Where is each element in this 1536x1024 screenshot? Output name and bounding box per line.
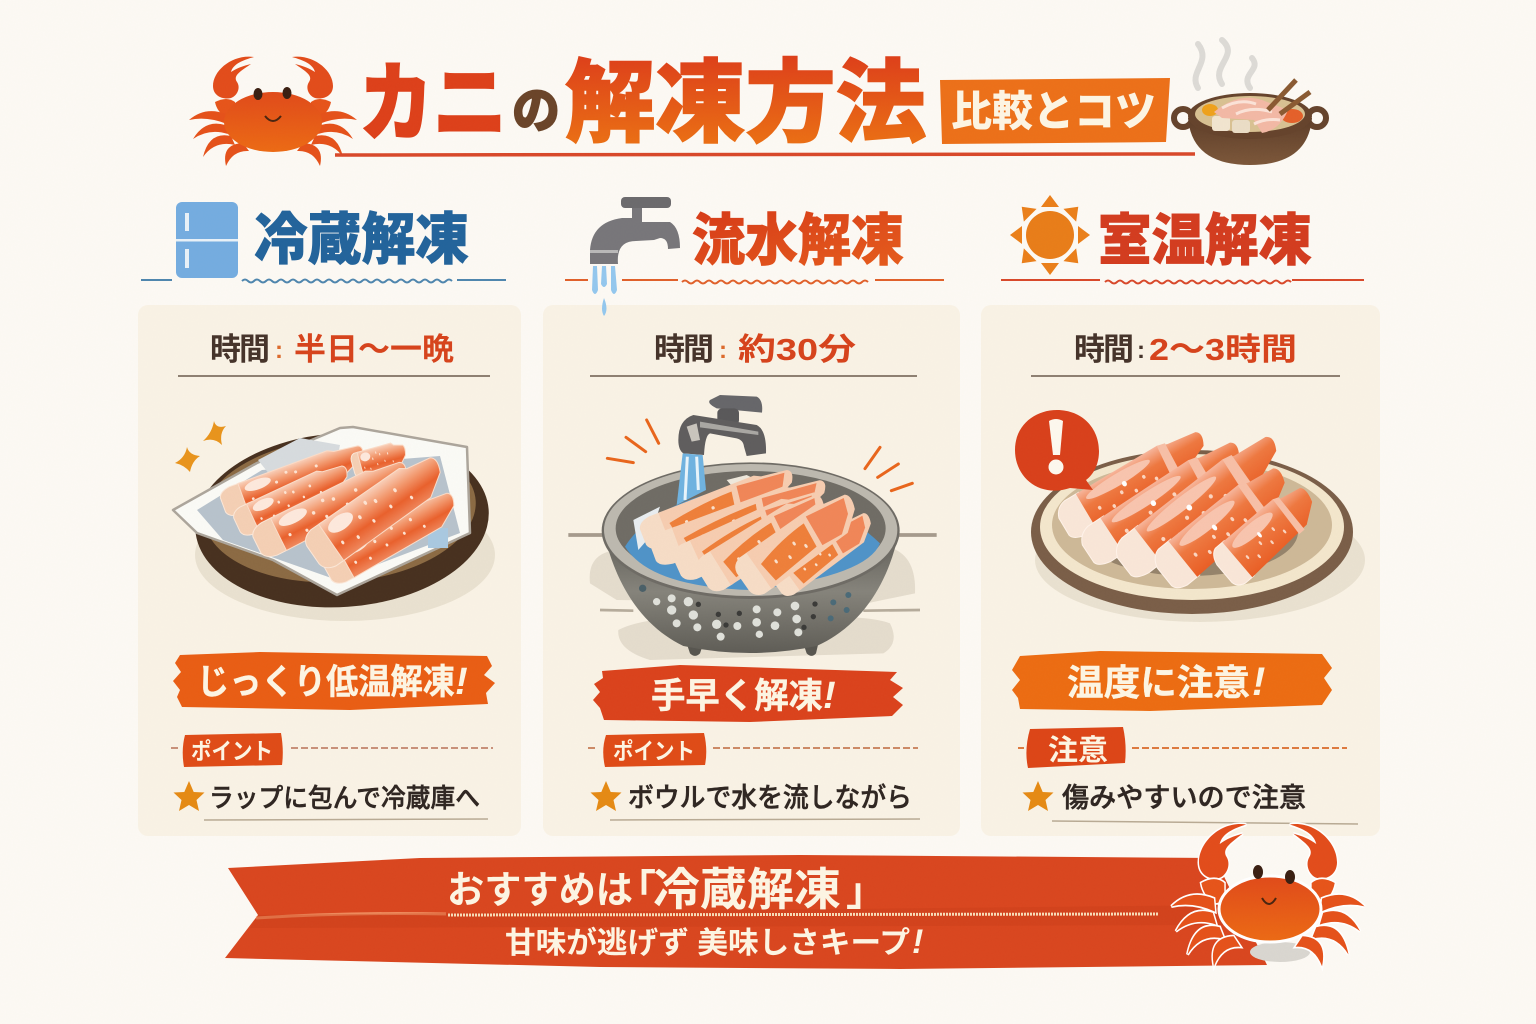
icon: sparkles [175, 421, 226, 472]
time divider [590, 375, 917, 377]
ribbon headline: 「 [616, 868, 656, 912]
subtitle tag: 比較とコツ [940, 78, 1170, 144]
banner: 手早く解凍！: ! [823, 675, 836, 717]
banner: じっくり低温解凍！: じっくり低温解凍 [197, 663, 455, 702]
tip underline [204, 819, 488, 820]
time label [654, 332, 856, 367]
ribbon headline: おすすめは [447, 870, 633, 912]
title: カニの解凍方法: 解凍方法 [565, 54, 926, 154]
time divider [178, 375, 490, 377]
recommendation ribbon [225, 855, 1267, 969]
title: カニの解凍方法: カニ [359, 56, 507, 152]
tip underline [610, 819, 920, 820]
tag: 注意: 注意 [1048, 734, 1108, 767]
wavy underline [1001, 280, 1364, 284]
banner: 手早く解凍！: 手早く解凍 [651, 677, 823, 716]
wavy underline [565, 280, 944, 284]
banner: 手早く解凍！ [593, 665, 903, 722]
wavy underline [141, 280, 506, 282]
title underline [335, 154, 1195, 155]
caution row [1018, 727, 1358, 824]
tag: ポイント [603, 733, 706, 767]
ribbon subline: 甘味が逃げず 美味しさキープ [505, 926, 910, 960]
dashed rule [1018, 747, 1347, 749]
time label: 時間 [210, 332, 270, 367]
time label: : [1137, 337, 1145, 364]
tag: 注意 [1026, 727, 1126, 768]
icon: sun [1010, 195, 1090, 275]
time label: 半日〜一晩 [294, 332, 454, 367]
illustration: colander under faucet [568, 395, 937, 660]
banner: 温度に注意！ [1012, 651, 1332, 711]
icon: faucet with drops [590, 197, 680, 316]
panel: room temperature thawing [981, 305, 1380, 836]
heading text: 冷蔵解凍 [254, 208, 469, 271]
time label: 時間 [654, 332, 714, 367]
dashed rule [171, 747, 493, 749]
ribbon headline [447, 864, 886, 915]
panel: refrigerator thawing [138, 305, 521, 836]
icon: star [174, 781, 204, 811]
heading text: 流水解凍 [692, 209, 904, 272]
subtitle tag: 比較とコツ: 比較とコツ [951, 88, 1156, 135]
icon: steaming hot pot [1174, 40, 1326, 165]
header [189, 40, 1326, 166]
tip text: ラップに包んで冷蔵庫へ [209, 783, 480, 813]
icon: star [1022, 781, 1054, 811]
point row [171, 733, 493, 820]
tip underline [1052, 821, 1358, 824]
time label [1074, 332, 1297, 367]
banner: じっくり低温解凍！ [173, 652, 495, 710]
time label: 約30分 [738, 332, 856, 367]
heading text: 室温解凍 [1098, 209, 1312, 272]
ribbon divider [448, 914, 1158, 915]
time divider [1031, 375, 1340, 377]
banner: 温度に注意！: ! [1252, 660, 1265, 704]
column heading: 冷蔵解凍 [141, 202, 506, 282]
time label [210, 332, 454, 367]
time label: : [275, 337, 283, 364]
tag: ポイント: ポイント [191, 738, 273, 764]
column heading: 流水解凍 [565, 197, 944, 316]
icon: crab mascot [189, 57, 357, 166]
illustration: crab legs on plate [1031, 424, 1365, 622]
ribbon exclamation: ! [912, 923, 923, 961]
title: カニの解凍方法: の [512, 83, 560, 139]
column heading: 室温解凍 [1001, 195, 1364, 284]
time label: 2〜3時間 [1149, 332, 1297, 367]
icon: warning speech bubble [1015, 410, 1099, 491]
title: カニの解凍方法 [359, 54, 926, 154]
icon: bottom crab mascot [1171, 824, 1365, 966]
tip text: ボウルで水を流しながら [628, 783, 912, 813]
point row [588, 733, 920, 820]
ribbon headline: 冷蔵解凍 [653, 864, 841, 915]
illustration: crab legs wrapped on wooden plate [173, 423, 495, 621]
banner: じっくり低温解凍！: ! [455, 661, 468, 703]
time label: 時間 [1074, 332, 1134, 367]
tag: ポイント: ポイント [613, 738, 695, 764]
icon: star [590, 781, 622, 811]
tip text: 傷みやすいので注意 [1062, 783, 1306, 813]
dashed rule [588, 747, 918, 749]
ribbon headline: 」 [846, 870, 886, 914]
banner: 温度に注意！: 温度に注意 [1067, 662, 1250, 703]
panel: running water thawing [543, 305, 960, 836]
time label: : [719, 337, 727, 364]
icon: fridge [176, 202, 238, 278]
